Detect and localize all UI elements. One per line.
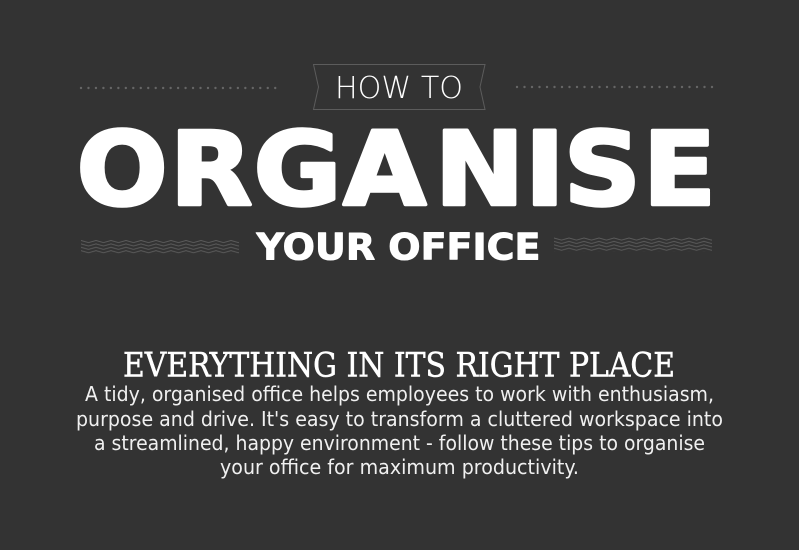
wave rule: left [81, 240, 239, 254]
intro paragraph: A tidy, organised office helps employees to work with enthusiasm, [85, 382, 714, 406]
intro paragraph: your office for maximum productivity. [220, 455, 579, 479]
dotted rule: left [81, 87, 276, 89]
header: title lockup [77, 64, 716, 268]
heading: HOW TO: HOW TO [335, 71, 463, 106]
intro heading: EVERYTHING IN ITS RIGHT PLACE [123, 346, 675, 386]
heading: YOUR OFFICE: YOUR OFFICE [255, 226, 540, 268]
intro section [76, 346, 723, 479]
heading: ORGANISE: ORGANISE [77, 110, 716, 229]
dotted rule: right [517, 86, 713, 88]
intro paragraph: a streamlined, happy environment - follow these tips to organise [94, 431, 705, 455]
intro paragraph: purpose and drive. It's easy to transform a cluttered workspace into [76, 407, 723, 431]
wave rule: right [554, 238, 712, 251]
ribbon banner [314, 64, 485, 110]
intro paragraph [76, 382, 723, 479]
